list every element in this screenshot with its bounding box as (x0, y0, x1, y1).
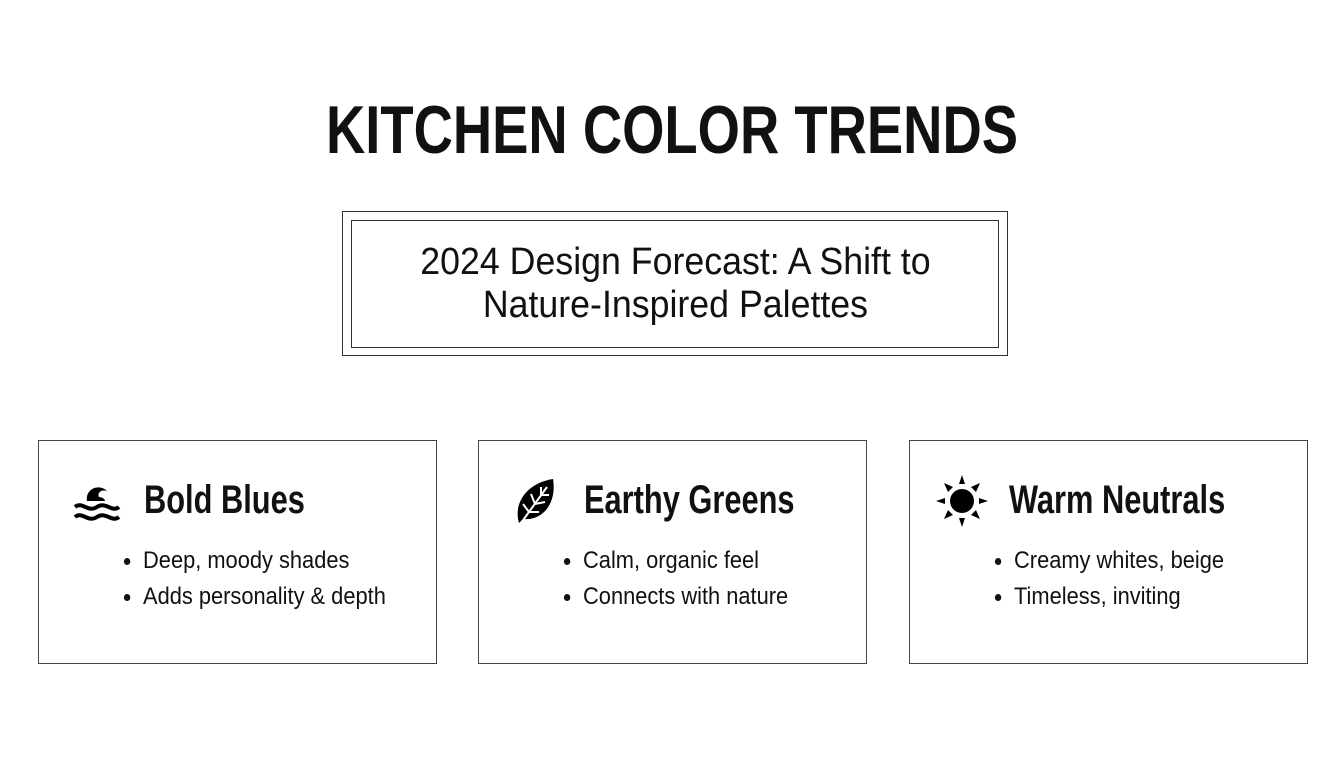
panel: earthy greens: Calm, organic feel (583, 547, 759, 574)
title: KITCHEN COLOR TRENDS (326, 92, 1018, 168)
icon: sun (936, 475, 988, 527)
panel: warm neutrals: Warm Neutrals (1009, 478, 1225, 522)
panel: warm neutrals: Timeless, inviting (1014, 583, 1181, 610)
panel: warm neutrals (909, 440, 1308, 664)
subtitle box: Nature-Inspired Palettes (482, 284, 868, 326)
panel: earthy greens: Earthy Greens (584, 478, 795, 522)
panel: bold blues (38, 440, 437, 664)
icon: waves (74, 487, 120, 521)
panel: warm neutrals: Creamy whites, beige (1014, 547, 1224, 574)
panel: bold blues: Deep, moody shades (143, 547, 349, 574)
subtitle box (342, 211, 1008, 356)
panel: earthy greens (478, 440, 867, 664)
panel: bold blues: Bold Blues (144, 478, 305, 522)
icon: leaf (518, 479, 554, 523)
panel: earthy greens: Connects with nature (583, 583, 788, 610)
panel: bold blues: Adds personality & depth (143, 583, 386, 610)
subtitle box: 2024 Design Forecast: A Shift to (420, 241, 930, 283)
